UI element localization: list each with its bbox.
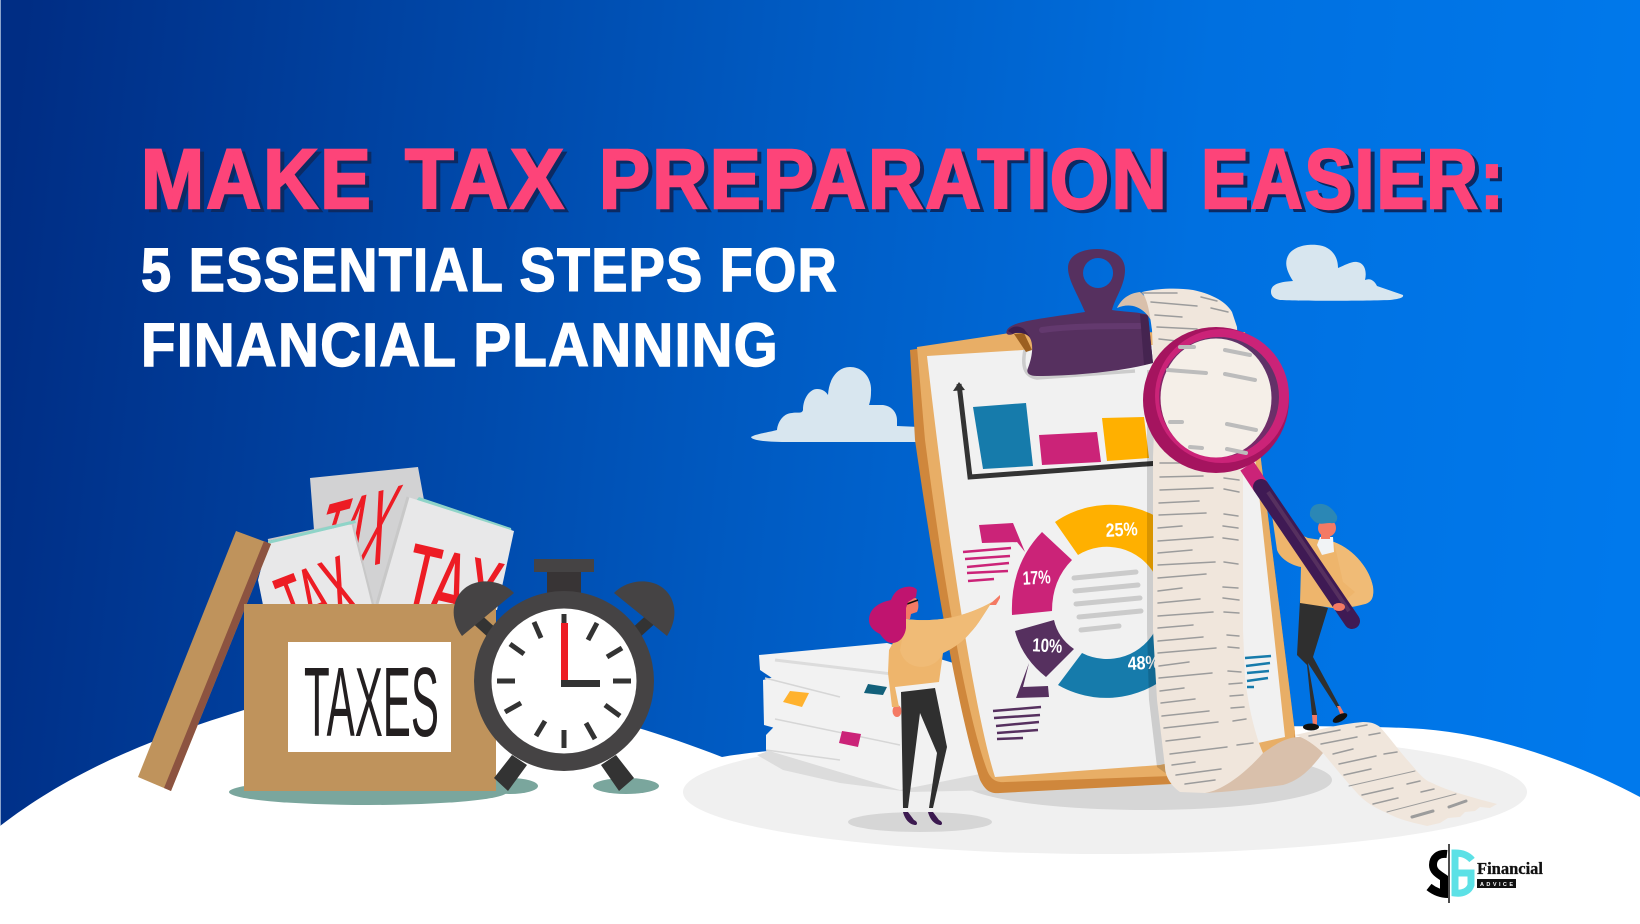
receipt upper sheet <box>1142 289 1263 793</box>
bar chart <box>953 382 1160 477</box>
teal tab <box>864 684 887 695</box>
white hills <box>0 695 1640 924</box>
back tax sheet <box>297 462 424 610</box>
title: EASIER: <box>1201 132 1506 226</box>
right tax sheet: TAX <box>394 523 511 654</box>
rim <box>1143 327 1289 473</box>
man legs <box>1297 600 1340 715</box>
clip underside shadow <box>1024 350 1135 378</box>
box lid <box>138 531 271 791</box>
woman sweater <box>888 602 992 707</box>
box label <box>288 642 451 757</box>
clock foot shadow left <box>482 778 538 794</box>
handle collar <box>1247 466 1261 487</box>
logo wordmark: Financial <box>1477 859 1543 878</box>
man <box>1268 504 1373 730</box>
man hand upper <box>1268 504 1276 512</box>
cardboard box <box>244 604 496 791</box>
right tax sheet <box>375 497 514 654</box>
receipt lower sheet <box>1295 722 1497 826</box>
clock ticks <box>497 614 631 748</box>
lens <box>1160 338 1272 458</box>
teal sheet edges <box>415 497 512 533</box>
paper sheet <box>927 345 1285 777</box>
receipt back curl <box>1117 292 1160 330</box>
woman glasses <box>907 600 918 604</box>
woman hand lower <box>892 705 902 717</box>
clipboard shadow <box>960 750 1332 810</box>
receipt lines <box>1142 293 1466 817</box>
receipt fold <box>1205 737 1323 793</box>
lens lines <box>1168 347 1256 453</box>
group: tax box and clock: TAXES <box>304 647 439 757</box>
logo S <box>1429 854 1448 894</box>
woman <box>869 587 1000 825</box>
clock button <box>534 559 594 594</box>
receipt shadow strip <box>1147 370 1190 780</box>
box shadow <box>229 779 507 805</box>
man collar <box>1317 537 1334 555</box>
back tax sheet: TAX <box>297 462 411 608</box>
clipboard frame <box>910 332 1297 793</box>
teal legend <box>1245 656 1271 687</box>
magenta legend <box>963 523 1025 581</box>
subtitle: 5 ESSENTIAL STEPS FOR <box>141 236 838 304</box>
clock body <box>474 591 654 771</box>
logo <box>1429 844 1543 903</box>
woman head <box>869 587 918 643</box>
subtitle: FINANCIAL PLANNING <box>141 311 779 379</box>
title: PREPARATION <box>599 132 1169 226</box>
grey ground ellipse <box>683 730 1527 854</box>
logo badge: ADVICE <box>1480 882 1513 888</box>
clock legs <box>494 755 634 791</box>
group: tax box and clock <box>138 462 674 805</box>
label 48%: 48% <box>1127 652 1160 675</box>
title: MAKE <box>141 132 373 226</box>
donut chart <box>1012 505 1190 698</box>
clock face <box>492 608 636 754</box>
logo divider <box>1448 844 1450 903</box>
title <box>141 132 1506 226</box>
paper stack <box>757 643 1000 792</box>
clip <box>1006 249 1153 376</box>
cloud left <box>751 367 922 442</box>
purple legend <box>993 663 1049 739</box>
magnifying glass <box>1143 327 1352 621</box>
woman trousers <box>901 688 947 808</box>
subtitle <box>141 236 838 379</box>
left tax sheet: TAX <box>265 539 370 659</box>
clock bells <box>454 581 674 640</box>
woman hair <box>869 587 917 643</box>
clipboard <box>910 249 1297 793</box>
magenta tab <box>839 731 861 747</box>
title: TAX <box>405 132 566 226</box>
man sweater <box>1272 512 1373 608</box>
left tax sheet <box>258 522 373 659</box>
alarm clock <box>454 559 674 791</box>
label 10%: 10% <box>1032 635 1063 658</box>
woman shadow <box>848 812 992 832</box>
label 17%: 17% <box>1022 567 1051 590</box>
clock foot shadow right <box>593 778 659 794</box>
woman pointing hand <box>990 595 1000 605</box>
yellow tab <box>783 691 809 707</box>
clock hands <box>561 623 600 687</box>
cloud right <box>1271 245 1403 301</box>
donut centre lines <box>1074 572 1141 630</box>
man head <box>1310 504 1337 539</box>
man socks <box>1312 706 1345 727</box>
teal sheet edge left <box>268 520 356 544</box>
label 25%: 25% <box>1105 519 1138 542</box>
man hand on handle <box>1333 603 1345 611</box>
woman shoes <box>903 812 942 825</box>
handle <box>1261 487 1352 621</box>
man shoes <box>1303 711 1349 730</box>
receipt <box>1117 289 1497 826</box>
logo G <box>1455 853 1472 893</box>
